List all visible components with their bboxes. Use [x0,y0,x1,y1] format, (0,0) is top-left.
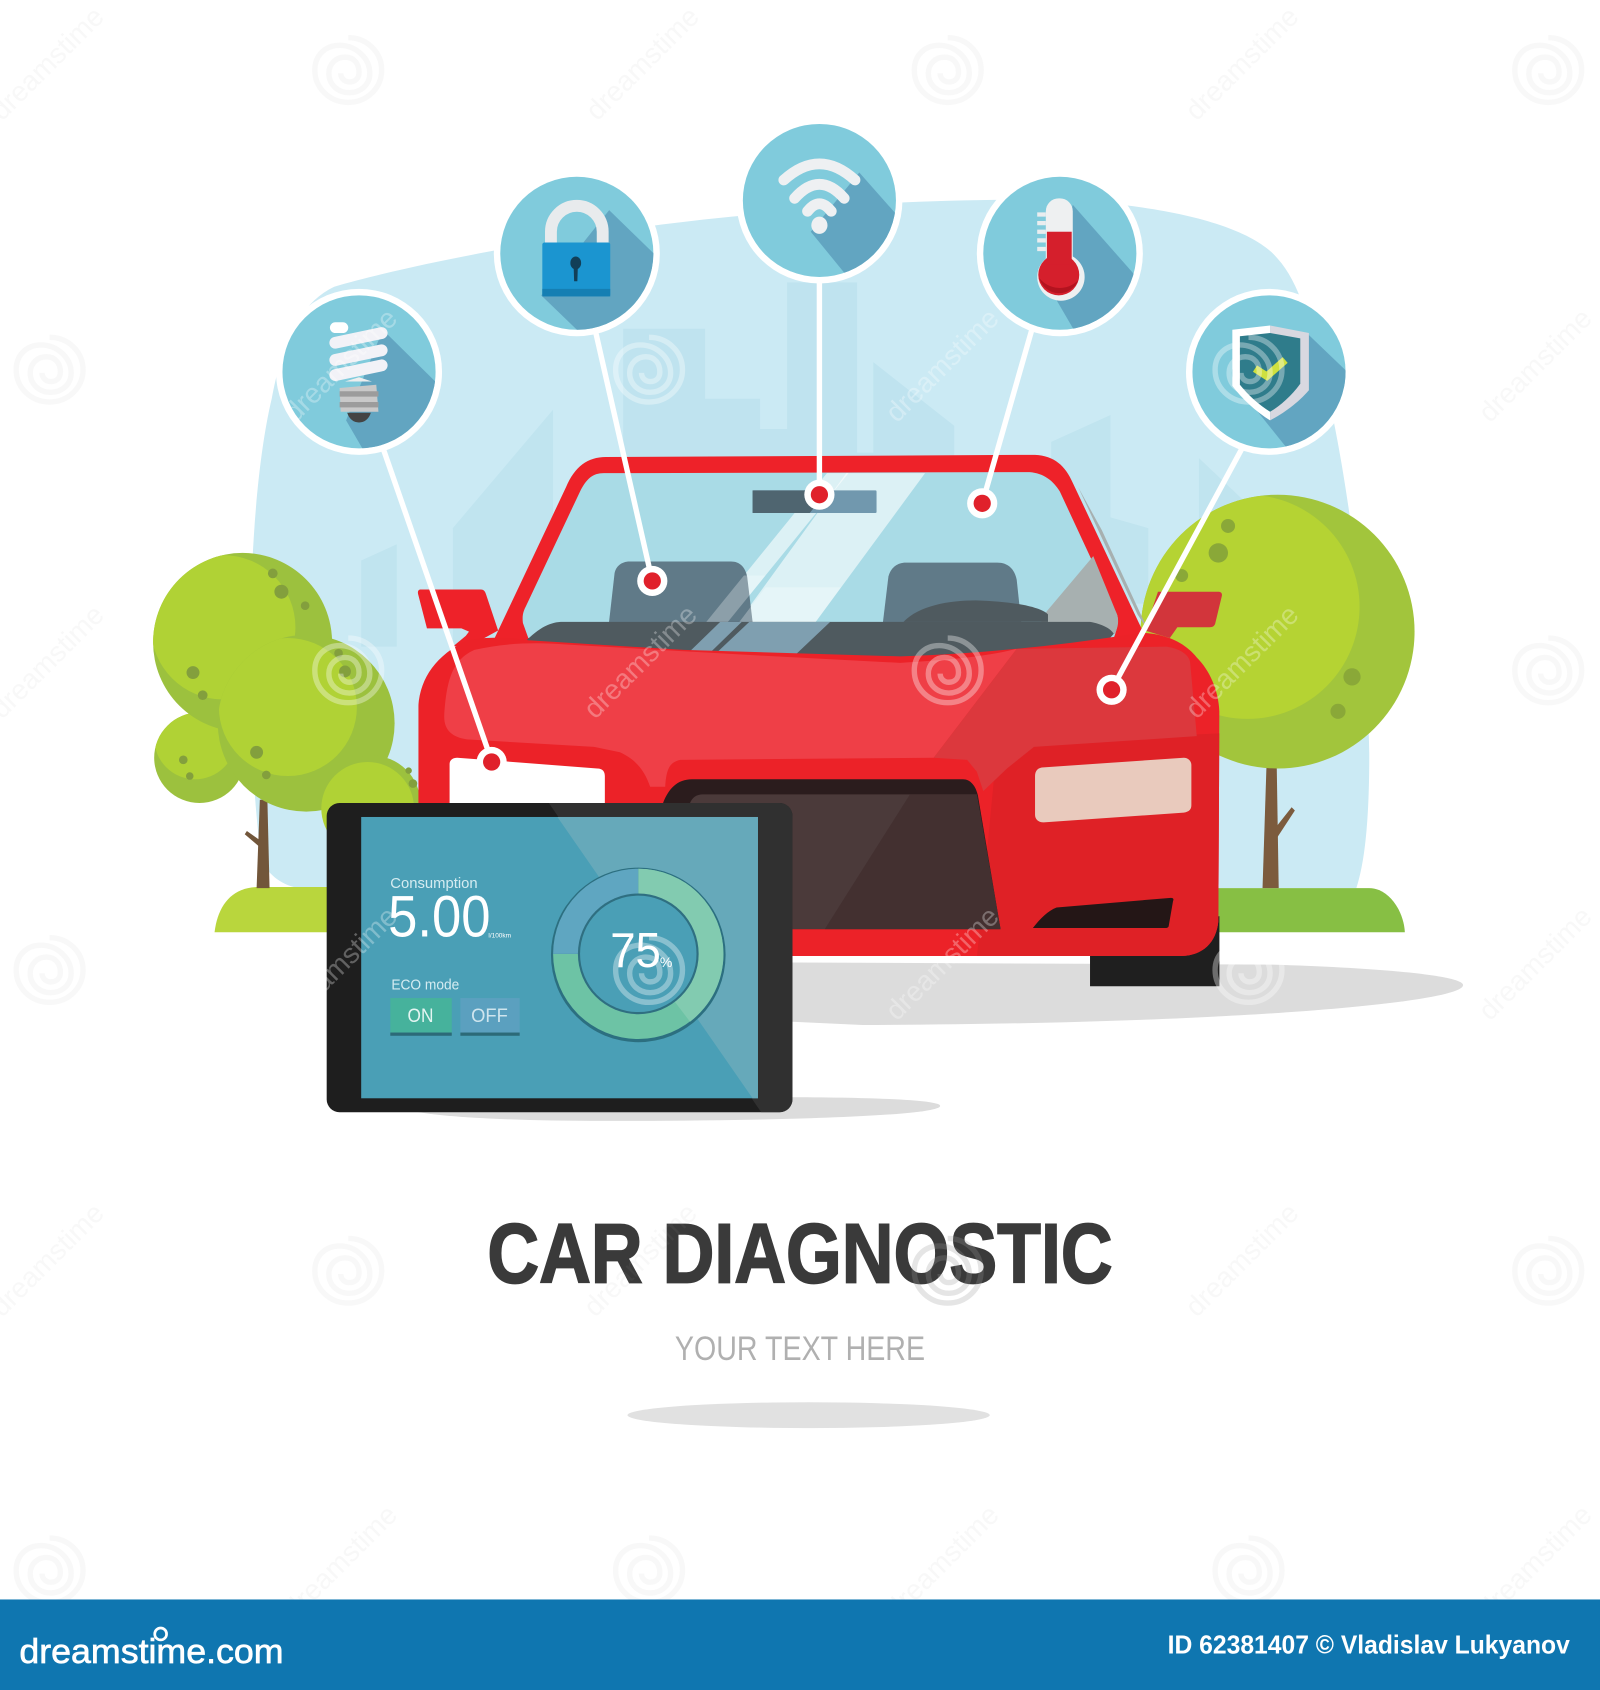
eco mode toggle: ECO mode [391,976,459,993]
rear view mirror [753,490,877,513]
watermark pattern: dreamstime [1472,302,1598,428]
title shadow [627,1402,990,1428]
footer bar [0,1599,1600,1690]
watermark pattern: dreamstime [1179,599,1305,724]
watermark pattern: dreamstime [580,1,705,126]
watermark pattern: dreamstime [278,901,403,1026]
car [410,455,1229,986]
car body [410,625,1229,970]
side vent [1033,898,1173,928]
eco mode toggle [390,976,520,1036]
consumption readout: l/100km [488,933,511,940]
eco mode toggle: OFF [471,1005,508,1027]
icon: wifi [738,124,902,284]
footer logo: dreamstime.com [19,1633,284,1671]
watermark pattern: dreamstime [278,1499,403,1624]
tree right [1135,495,1415,888]
title: CAR DIAGNOSTIC [487,1207,1113,1301]
connector lines [384,278,1242,761]
air intake [663,779,1001,929]
tablet frame [327,803,792,1112]
car roof frame [491,455,1145,647]
watermark pattern: dreamstime [879,302,1005,428]
car shadow [792,962,1463,1025]
icon: padlock [494,176,660,336]
icon: thermometer [976,176,1143,336]
ground left [215,887,345,932]
watermark pattern: dreamstime [879,1499,1005,1624]
ground right [1208,888,1405,932]
side mirror right [1145,592,1222,638]
watermark pattern: dreamstime [278,302,403,428]
watermark pattern: dreamstime [577,1197,703,1322]
tablet [327,803,792,1112]
seats and dashboard [524,562,1114,660]
connector dots [477,480,1127,777]
consumption readout: Consumption [390,875,478,892]
watermark pattern: dreamstime [1472,1499,1598,1624]
subtitle: YOUR TEXT HERE [675,1330,925,1368]
watermark pattern: dreamstime [1472,901,1598,1026]
icon: shield [1186,288,1346,455]
consumption readout: 5.00 [388,885,491,950]
headlight right [1035,758,1191,822]
sky and city backdrop [250,200,1369,888]
headlight left [450,758,605,803]
tablet shadow [410,1097,940,1121]
tablet screen [361,817,758,1098]
watermark pattern: dreamstime [577,599,703,724]
donut gauge [551,868,726,1042]
watermark pattern: dreamstime [1179,1197,1305,1322]
side mirror left [418,590,498,647]
donut gauge: % [660,954,672,970]
windshield [523,472,1118,652]
footer credit: ID 62381407 © Vladislav Lukyanov [1168,1631,1570,1659]
tree left [151,553,420,888]
car wheel [1090,916,1219,986]
watermark pattern: dreamstime [879,901,1005,1026]
eco mode toggle: ON [408,1005,433,1027]
watermark pattern: dreamstime [1179,1,1305,126]
icon: light bulb [276,288,442,455]
donut gauge: 75 [610,922,661,978]
